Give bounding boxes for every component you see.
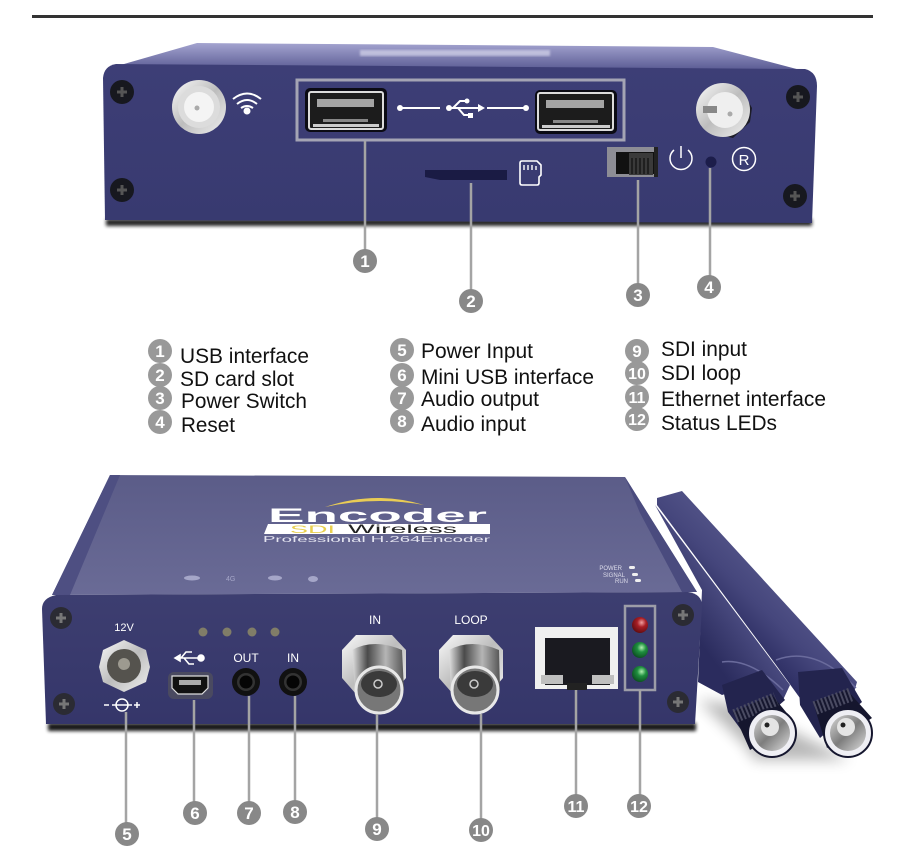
device: rear view (SDI side) <box>42 475 702 731</box>
legend item 12 <box>625 407 777 435</box>
status labels: POWER <box>599 566 623 572</box>
antenna connector left <box>172 80 226 134</box>
power jack <box>99 640 150 692</box>
SDI in connector <box>342 635 406 713</box>
device front panel <box>42 592 702 724</box>
callout 2 <box>459 289 483 313</box>
front antenna neck <box>722 670 785 735</box>
status labels: RUN <box>615 579 628 585</box>
rear antenna knurled ring <box>813 690 872 748</box>
screw top left <box>110 80 134 104</box>
ground shadow <box>698 700 850 760</box>
legend item 5: 5 <box>397 341 407 360</box>
green LED lower <box>632 666 648 682</box>
legend item 12: Status LEDs <box>661 412 777 435</box>
icon: USB mini <box>175 652 204 664</box>
legend item 2: 2 <box>155 366 165 385</box>
legend item 4 <box>148 410 235 437</box>
logo: Encoder SDI Wireless <box>263 498 490 544</box>
callout 10: 10 <box>472 823 490 840</box>
icon: SD card <box>520 161 541 185</box>
legend item 8 <box>390 409 526 436</box>
legend item 8: Audio input <box>421 413 526 436</box>
rear antenna body <box>657 491 857 712</box>
logo Wireless: Wireless <box>348 522 457 536</box>
screw bottom left <box>110 178 134 202</box>
callout 5: 5 <box>122 825 132 844</box>
legend item 2 <box>148 363 294 391</box>
faint logo on top face <box>360 50 550 56</box>
power switch <box>607 147 658 177</box>
callout 7 <box>237 801 261 825</box>
legend item 7: Audio output <box>421 388 539 411</box>
status labels: SIGNAL <box>603 573 626 579</box>
callout 6: 6 <box>190 804 200 823</box>
legend item 5: Power Input <box>421 340 533 363</box>
header rule <box>32 15 873 18</box>
screw top right <box>672 604 694 626</box>
logo banner <box>264 524 490 534</box>
callout 8: 8 <box>290 803 300 822</box>
red LED <box>632 617 648 633</box>
front antenna knurled ring <box>733 695 795 750</box>
USB link with symbol <box>397 98 529 118</box>
icon: reset <box>732 148 756 170</box>
front antenna body <box>655 505 790 700</box>
label: IN SDI: IN <box>369 613 381 627</box>
front antenna connector tip <box>748 709 796 757</box>
legend item 1 <box>148 339 309 368</box>
legend item 1: USB interface <box>180 345 309 368</box>
callout 12 <box>627 794 651 818</box>
front antenna collar highlight <box>722 662 783 690</box>
legend item 6: 6 <box>397 366 407 385</box>
label: LOOP: LOOP <box>454 613 488 627</box>
indicator LEDs <box>198 628 280 636</box>
device front panel <box>103 64 817 223</box>
antennas <box>655 491 872 760</box>
callout 1: 1 <box>360 252 370 271</box>
callout lines: top device <box>365 141 710 292</box>
device top face <box>52 475 697 595</box>
top face indicator icons: 4G <box>226 576 235 583</box>
status labels <box>599 566 641 585</box>
reset hole <box>706 156 716 168</box>
callout 9 <box>365 817 389 841</box>
device top face <box>117 43 808 72</box>
top face indicator icons <box>184 576 318 583</box>
top face right bevel <box>625 477 697 592</box>
icon: wifi <box>233 94 261 114</box>
rear antenna connector tip <box>824 709 872 757</box>
legend item 11: 11 <box>629 390 646 407</box>
device shadow <box>48 723 696 731</box>
legend column 1 <box>148 339 309 437</box>
screw bottom right <box>667 691 689 713</box>
label: OUT: OUT <box>233 651 259 665</box>
logo arc <box>325 498 424 507</box>
status LED box <box>625 606 655 690</box>
screw bottom right <box>783 184 807 208</box>
audio in jack <box>279 668 307 696</box>
green LED upper <box>632 642 648 658</box>
label: 12V: 12V <box>114 622 134 634</box>
legend item 9: SDI input <box>661 338 747 361</box>
top face left bevel <box>52 475 120 595</box>
rear antenna collar highlight <box>776 656 856 688</box>
callout 10 <box>469 818 493 842</box>
legend item 10: 10 <box>628 366 646 383</box>
legend item 9: 9 <box>632 342 642 361</box>
legend item 4: 4 <box>155 413 165 432</box>
legend item 12: 12 <box>628 412 646 429</box>
callout 2: 2 <box>466 292 476 311</box>
legend column 2 <box>390 338 594 436</box>
icon: power <box>670 146 692 169</box>
polarity symbol <box>104 699 140 711</box>
icon: reset: R <box>739 152 750 169</box>
audio out jack <box>232 668 260 696</box>
callout 4 <box>697 275 721 299</box>
legend item 3 <box>148 386 307 413</box>
SD card slot <box>425 170 507 180</box>
legend item 3: Power Switch <box>181 390 307 413</box>
USB port right <box>535 90 617 134</box>
callout 12: 12 <box>630 799 648 816</box>
label: IN audio: IN <box>287 651 299 665</box>
rear antenna neck <box>798 668 862 738</box>
callout 3 <box>626 283 650 307</box>
callout 7: 7 <box>244 804 254 823</box>
USB port left <box>305 88 387 132</box>
callout 11: 11 <box>568 799 585 816</box>
legend item 10: SDI loop <box>661 362 741 385</box>
legend item 6: Mini USB interface <box>421 366 594 389</box>
logo tagline: Professional H.264Encoder <box>263 534 490 544</box>
logo SDI: SDI <box>290 524 335 536</box>
legend item 11: Ethernet interface <box>661 388 826 411</box>
USB highlight box <box>297 80 624 140</box>
callout 11 <box>564 794 588 818</box>
device: top view (USB side) <box>103 43 817 226</box>
screw top right <box>786 85 810 109</box>
screw bottom left <box>53 693 75 715</box>
legend item 10 <box>625 361 741 385</box>
screw top left <box>50 607 72 629</box>
legend item 9 <box>625 338 747 363</box>
callout 6 <box>183 801 207 825</box>
legend item 4: Reset <box>181 414 235 437</box>
legend item 1: 1 <box>155 342 165 361</box>
callout 4: 4 <box>704 278 714 297</box>
legend item 7: 7 <box>397 389 407 408</box>
callout 5 <box>115 822 139 846</box>
callout lines: rear device <box>126 690 640 824</box>
logo wordmark: Encoder <box>268 506 489 527</box>
legend item 2: SD card slot <box>180 368 294 391</box>
antenna connector right <box>696 83 752 138</box>
legend column 3 <box>625 338 826 435</box>
callout 3: 3 <box>633 286 643 305</box>
callout 8 <box>283 800 307 824</box>
device shadow <box>106 219 812 226</box>
ethernet port <box>535 627 618 690</box>
legend item 3: 3 <box>155 389 165 408</box>
callout 1 <box>353 249 377 273</box>
mini USB port <box>168 672 213 699</box>
SDI loop connector <box>439 635 503 713</box>
legend item 8: 8 <box>397 412 407 431</box>
callout 9: 9 <box>372 820 382 839</box>
